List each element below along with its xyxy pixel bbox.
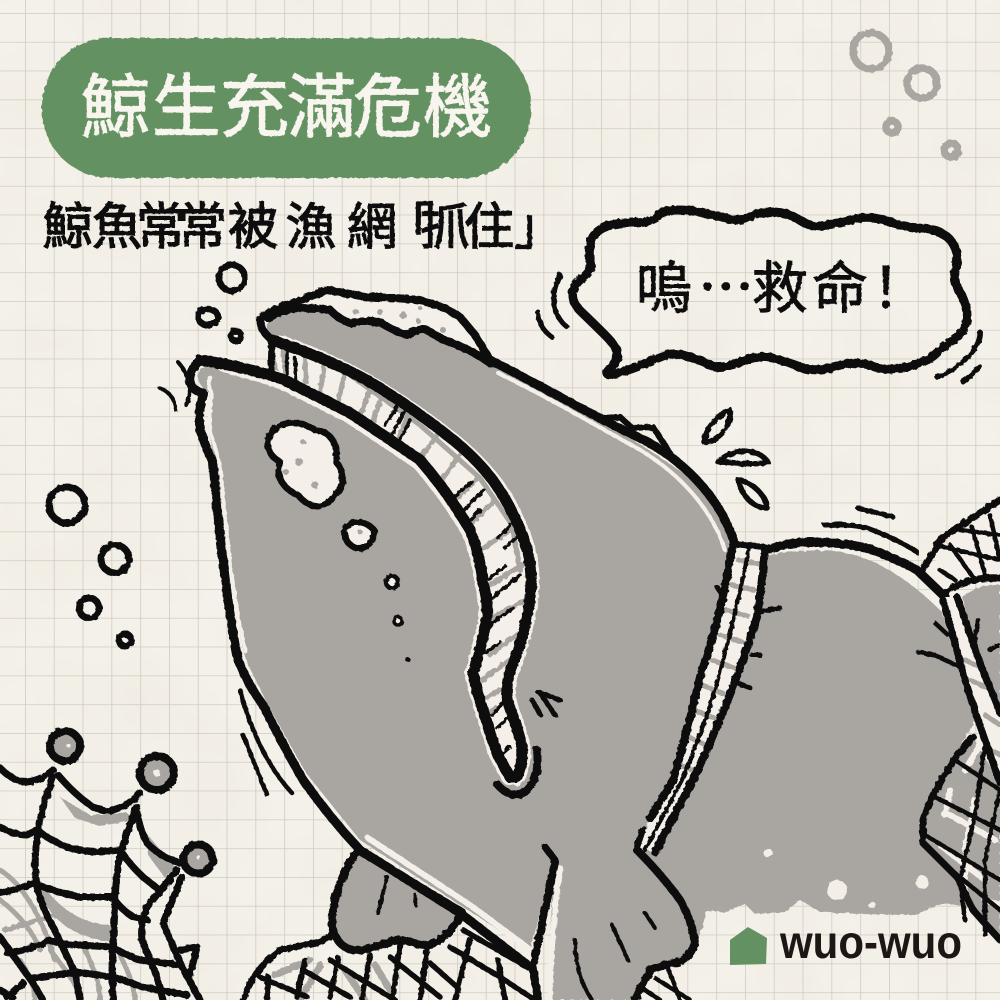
small dorsal bump — [602, 417, 670, 453]
subtitle: 鯨魚常常被漁網「抓住」 — [43, 199, 564, 255]
bubbles: left — [49, 487, 131, 646]
cream strips beside the flipper — [368, 838, 528, 948]
upper lip line — [272, 340, 531, 777]
barnacle patch — [297, 295, 488, 358]
tail flipper outline — [533, 862, 555, 1000]
motion lines around mouth corner — [497, 750, 538, 795]
net shadow — [60, 797, 135, 826]
barnacle dots — [353, 306, 446, 333]
mouth cream halo, lower — [225, 364, 510, 777]
title banner — [42, 38, 531, 178]
speech bubble — [572, 210, 967, 375]
head strap — [640, 544, 780, 852]
left flipper — [332, 850, 462, 950]
net floats — [50, 731, 80, 761]
head front outline — [190, 360, 530, 967]
net: bottom left — [0, 731, 212, 1000]
mouth line — [200, 360, 510, 777]
skin spot large — [268, 423, 343, 506]
skin spot medium — [344, 522, 375, 548]
ticks beside mouth corner — [532, 692, 560, 715]
net: bottom centre — [243, 930, 535, 1000]
icon: house — [730, 927, 767, 965]
bubbles: near mouth — [198, 265, 245, 341]
back outline — [490, 360, 735, 545]
motion lines at snout — [160, 362, 189, 410]
paper spots on rear body — [764, 848, 928, 908]
logo: wuo-wuo — [779, 916, 962, 968]
head front cream highlight — [209, 378, 246, 652]
barnacle outline — [260, 290, 490, 360]
flipper edge highlight — [550, 868, 560, 1000]
title banner: 鯨生充滿危機 — [81, 69, 492, 146]
sweat drops and motion lines — [538, 275, 980, 552]
baleen end stroke — [271, 343, 272, 372]
net: bottom right of flipper — [645, 968, 690, 1000]
rear body fill — [637, 550, 975, 962]
flipper creases — [575, 913, 655, 1000]
rear back outline — [767, 542, 945, 597]
baleen strokes — [287, 350, 520, 753]
small skin spots — [283, 440, 410, 662]
flipper right outline — [635, 830, 695, 1000]
whale — [160, 290, 975, 1000]
baleen shading — [283, 350, 526, 715]
upper jaw top line — [268, 308, 490, 363]
speech bubble: 嗚⋯救命！ — [636, 257, 914, 320]
motion lines under head — [240, 690, 292, 795]
back cream highlight — [498, 373, 725, 550]
net: right side — [918, 500, 1000, 940]
flipper notch — [545, 847, 555, 860]
mouth cream halo, upper — [282, 344, 531, 777]
bubbles: top right — [853, 33, 958, 157]
left flipper creases — [378, 877, 416, 913]
head and tail flipper fill — [198, 310, 730, 1000]
baleen — [272, 340, 531, 777]
